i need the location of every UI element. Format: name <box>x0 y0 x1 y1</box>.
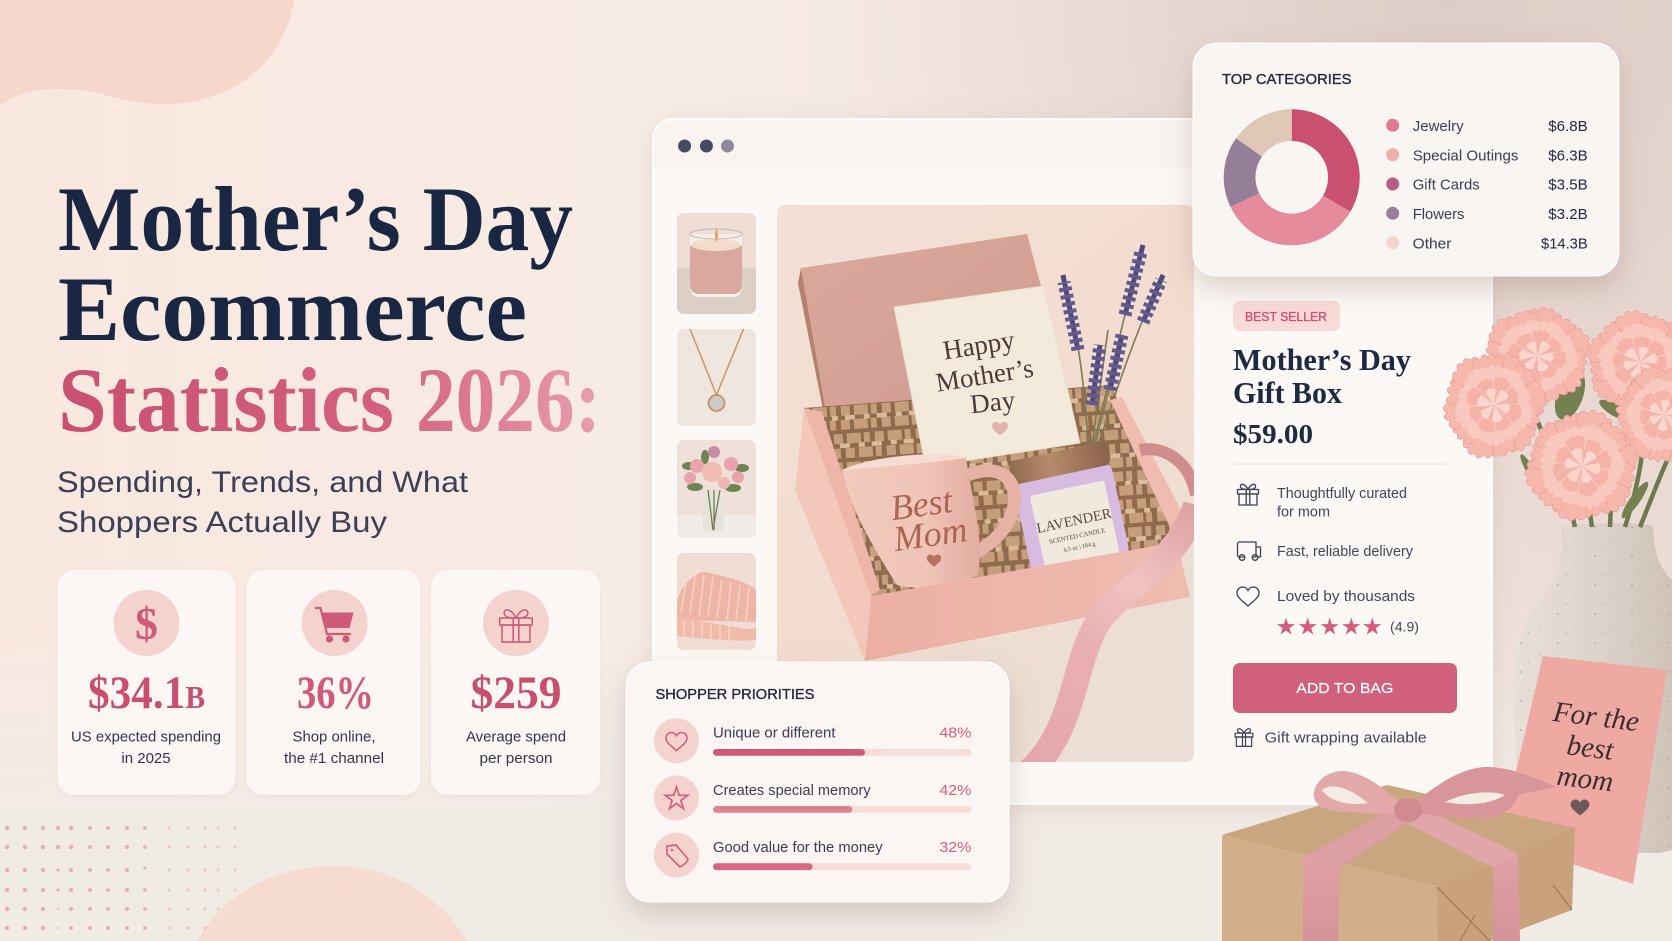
vase <box>1513 523 1672 853</box>
feature: loved: Loved by thousands <box>1277 589 1415 605</box>
row: unique or different <box>654 718 971 763</box>
row: creates special memory: 42% <box>939 782 971 799</box>
legend: other: $14.3B <box>1541 235 1588 252</box>
icon: dollar: $ <box>135 598 158 649</box>
gift wrapping note: Gift wrapping available <box>1265 730 1427 746</box>
icon: dollar <box>114 590 180 656</box>
label: Average spend <box>466 728 566 746</box>
title <box>58 168 601 451</box>
button: add to bag: ADD TO BAG <box>1296 680 1393 697</box>
feature: curated: for mom <box>1277 504 1330 520</box>
label: per person <box>480 750 552 767</box>
donut chart <box>1224 109 1360 245</box>
badge: best seller: BEST SELLER <box>1245 309 1327 324</box>
card: for the best mom <box>1500 656 1667 884</box>
mug <box>842 454 1015 588</box>
heading: TOP CATEGORIES <box>1222 72 1352 88</box>
stat card: average spend <box>431 570 600 795</box>
legend: gift cards: Gift Cards <box>1413 177 1480 194</box>
candle jar <box>1009 442 1128 568</box>
title: Ecommerce <box>58 258 527 360</box>
candle jar: SCENTED CANDLE <box>1049 527 1106 546</box>
product name: Mother’s Day <box>1233 342 1411 377</box>
title: 2026: <box>416 349 601 451</box>
ribbon bow <box>1314 767 1557 822</box>
subtitle: Shoppers Actually Buy <box>57 506 387 539</box>
window control dots <box>678 140 734 152</box>
dot pattern <box>5 826 237 930</box>
legend: jewelry: $6.8B <box>1548 118 1588 135</box>
icon: gift <box>483 590 549 656</box>
card: Happy Mother's Day: Mother’s <box>934 353 1036 398</box>
legend: jewelry: Jewelry <box>1413 118 1464 135</box>
label: US expected spending <box>71 728 221 746</box>
box front wall <box>865 542 1190 661</box>
panel: shopper priorities <box>626 662 1009 902</box>
mug: Mom <box>890 509 970 559</box>
thumbnail: sweater <box>677 553 756 650</box>
feature: delivery: Fast, reliable delivery <box>1277 544 1414 560</box>
row: unique or different: 48% <box>939 724 971 741</box>
subtitle: Spending, Trends, and What <box>57 466 469 499</box>
satin ribbon <box>1025 449 1196 775</box>
card: for the best mom: best <box>1565 729 1616 767</box>
ribbon straps <box>1303 800 1520 941</box>
card: for the best mom: mom <box>1555 760 1615 798</box>
value: $259 <box>470 667 562 719</box>
box lid <box>798 234 1041 407</box>
legend: gift cards <box>1386 177 1588 194</box>
badge: best seller <box>1233 301 1340 331</box>
browser window <box>653 119 1492 804</box>
thumbnail: flowers <box>677 440 756 538</box>
icon: shopping cart <box>302 590 368 656</box>
price: $59.00 <box>1233 419 1313 449</box>
product name <box>1233 342 1411 410</box>
lavender <box>1063 245 1163 445</box>
feature: delivery <box>1238 542 1414 560</box>
heading: SHOPPER PRIORITIES <box>656 687 814 703</box>
legend: special outings: $6.3B <box>1548 147 1588 164</box>
row: good value: 32% <box>939 839 971 856</box>
decorative blob: bottom <box>197 866 467 941</box>
candle jar: LAVENDER <box>1035 506 1113 537</box>
legend: flowers: $3.2B <box>1548 206 1588 223</box>
label <box>71 728 221 767</box>
legend: flowers: Flowers <box>1413 206 1464 223</box>
legend: special outings: Special Outings <box>1413 147 1518 164</box>
label: the #1 channel <box>284 750 384 767</box>
row: creates special memory <box>654 776 971 820</box>
feature: curated <box>1238 484 1407 520</box>
thumbnail: candle <box>677 213 756 314</box>
card: Happy Mother's Day <box>894 286 1080 467</box>
legend: gift cards: $3.5B <box>1548 177 1588 194</box>
subtitle <box>57 466 469 539</box>
card: for the best mom: For the <box>1550 696 1641 738</box>
row: good value: Good value for the money <box>713 840 883 856</box>
panel: top categories <box>1193 43 1619 276</box>
card: Happy Mother's Day: Happy <box>941 325 1017 366</box>
carnation bouquet <box>1425 289 1672 537</box>
card: Happy Mother's Day: Day <box>969 385 1017 419</box>
legend: other <box>1386 235 1588 252</box>
row: creates special memory: Creates special memory <box>713 783 871 799</box>
legend: other: Other <box>1413 235 1451 252</box>
mug: Best <box>888 480 956 528</box>
legend: special outings <box>1386 147 1588 164</box>
product photo: gift box <box>777 205 1196 775</box>
button: add to bag <box>1233 663 1457 713</box>
value: 36% <box>297 667 374 719</box>
product name: Gift Box <box>1233 375 1342 410</box>
row: good value <box>654 832 971 878</box>
star rating: (4.9) <box>1390 618 1419 634</box>
label <box>466 728 566 767</box>
candle jar: 6.5 oz | 184 g <box>1063 541 1096 554</box>
legend: flowers <box>1386 206 1588 223</box>
box inner left wall <box>804 408 880 596</box>
feature: loved <box>1237 587 1415 606</box>
legend: jewelry <box>1386 118 1588 135</box>
row: unique or different: Unique or different <box>713 725 836 741</box>
label <box>284 728 384 767</box>
stat card: spending <box>58 570 236 795</box>
stat card: online share <box>246 570 420 795</box>
label: in 2025 <box>121 750 171 767</box>
box right wall <box>1110 397 1180 528</box>
feature: curated: Thoughtfully curated <box>1277 486 1407 502</box>
kraft gift box <box>1222 767 1575 941</box>
box interior and crinkle paper <box>800 385 1195 596</box>
title: Statistics <box>58 349 394 451</box>
thumbnail: necklace <box>677 329 756 426</box>
title: Mother’s Day <box>58 168 573 270</box>
decorative blob: top left <box>0 0 294 106</box>
label: Shop online, <box>292 728 376 746</box>
product panel <box>1233 301 1457 746</box>
value: $34.1B <box>88 667 205 719</box>
star rating <box>1277 618 1419 635</box>
